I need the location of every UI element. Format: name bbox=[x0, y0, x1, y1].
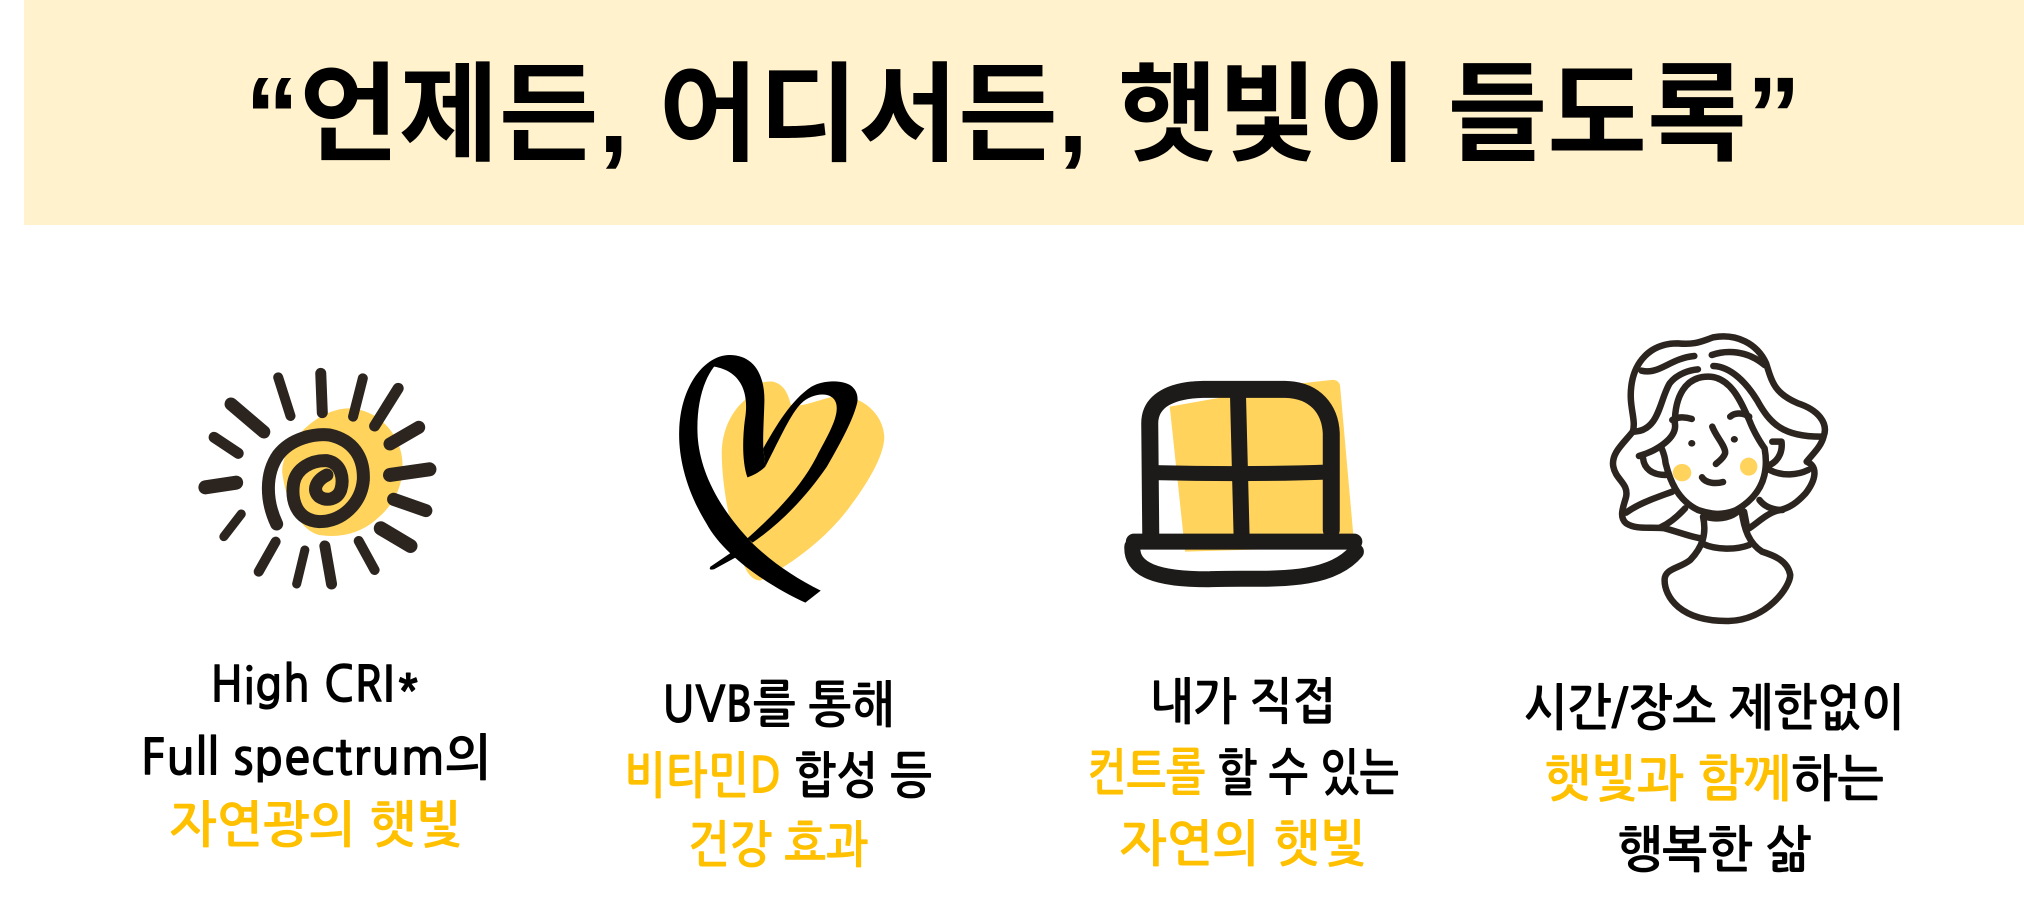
caption: direct control: 내가 직접 bbox=[1150, 676, 1336, 727]
caption: direct control: 자연의 햇빛 bbox=[1120, 818, 1366, 869]
icon: woman portrait bbox=[1613, 336, 1825, 621]
caption: high CRI full spectrum: 자연광의 햇빛 bbox=[170, 799, 462, 850]
caption: UVB health effect: 비타민D 합성 등 bbox=[624, 750, 932, 801]
title banner bbox=[24, 0, 2024, 225]
caption: UVB health effect: 건강 효과 bbox=[688, 819, 868, 870]
caption: high CRI full spectrum: High CRI* bbox=[210, 661, 422, 710]
caption: happy life with sunlight: 행복한 삶 bbox=[1617, 824, 1811, 875]
caption: UVB health effect: UVB를 통해 bbox=[662, 679, 894, 730]
icon: sun bbox=[205, 373, 429, 584]
title: “언제든, 어디서든, 햇빛이 들도록” bbox=[245, 54, 1801, 175]
caption: high CRI full spectrum: Full spectrum의 bbox=[140, 732, 492, 783]
caption: direct control: 컨트롤 할 수 있는 bbox=[1087, 747, 1399, 798]
icon: window bbox=[1132, 380, 1356, 579]
caption: direct control bbox=[1087, 676, 1399, 869]
caption: UVB health effect bbox=[624, 679, 932, 870]
caption: high CRI full spectrum bbox=[140, 661, 492, 850]
caption: happy life with sunlight: 햇빛과 함께하는 bbox=[1544, 753, 1884, 804]
caption: happy life with sunlight bbox=[1524, 682, 1904, 875]
icon: heart bbox=[679, 355, 884, 603]
caption: happy life with sunlight: 시간/장소 제한없이 bbox=[1524, 682, 1904, 733]
